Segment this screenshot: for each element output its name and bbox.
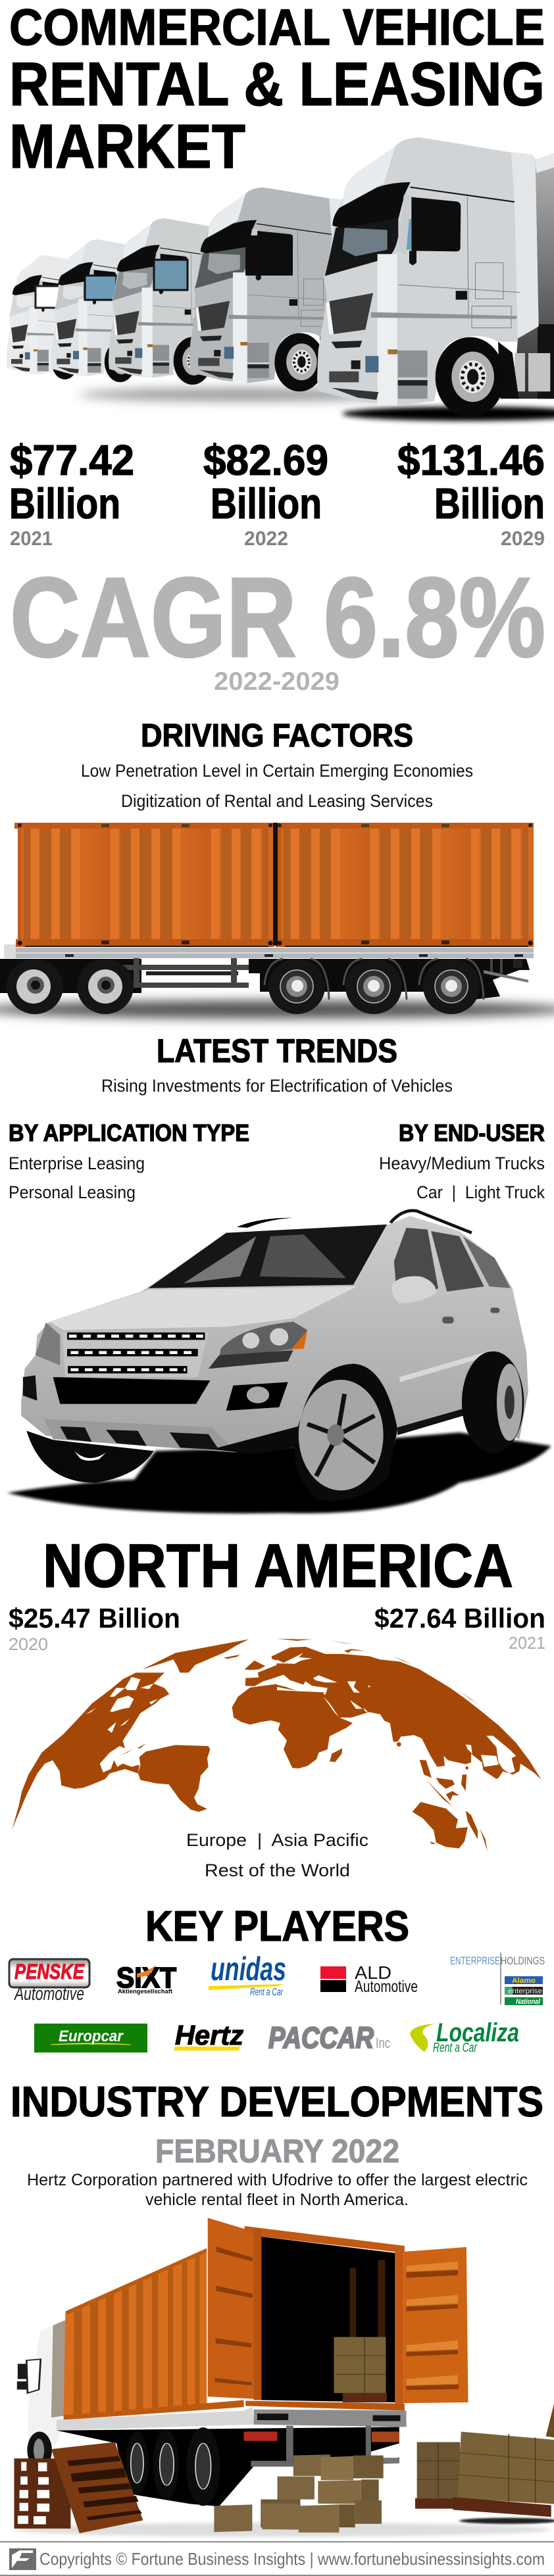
logo: Enterprise Holdings: ENTERPRISE [450,1955,500,1967]
segment: by application type: Personal Leasing [9,1182,136,1202]
stat: 2029 market size: 2029 [501,527,545,550]
stat: 2021 market size: 2021 [10,527,53,550]
logo: Penske Automotive: Automotive [14,1983,84,2005]
stat: north america 2021: $27.64 Billion [374,1603,545,1634]
logo: PACCAR: PACCAR [268,2021,374,2054]
logo: Penske Automotive [9,1959,89,2005]
footer [0,2541,554,2576]
heading: driving factors: DRIVING FACTORS [141,718,413,754]
text: driving factors list [81,761,473,811]
image: open container truck with pallets and boxes [14,2218,554,2537]
world map [12,1639,541,1851]
logo: ALD Automotive: Automotive [355,1978,418,1996]
logo: Sixt: Aktiengesellschaft [118,1988,173,1995]
title [9,0,545,182]
date: february 2022: FEBRUARY 2022 [155,2133,399,2170]
text: driving factors list: Low Penetration Level in Certain Emerging Economies [81,761,473,781]
logo: Enterprise Holdings: National [516,1998,541,2006]
segment: by application type: Enterprise Leasing [9,1154,145,1173]
logo: ALD Automotive [320,1962,418,1996]
logo: ALD Automotive: ALD [355,1962,391,1983]
logo: Hertz: Hertz [175,2020,243,2051]
text: other regions: Europe | Asia Pacific [186,1830,368,1850]
logo: Localiza [410,2018,519,2055]
logo: Unidas: unidas [211,1951,286,1987]
hero image: fleet of white trucks [7,137,554,421]
logo: Localiza: Rent a Car [433,2041,478,2055]
segment: by end-user [379,1119,545,1202]
heading: latest trends: LATEST TRENDS [157,1033,397,1069]
logo: Sixt: SIXT [116,1962,176,1994]
CAGR callout: 2022-2029 [214,668,340,696]
text: development description: vehicle rental fleet in North America. [145,2191,409,2209]
logo: Enterprise Holdings: enterprise [508,1987,542,1995]
stat: 2029 market size: $131.46 [397,436,545,484]
stat: north america 2020: 2020 [9,1634,48,1654]
icon: fortune business insights logo [9,2548,36,2570]
heading: key players: KEY PLAYERS [145,1902,409,1950]
title: MARKET [9,112,245,182]
stat: 2021 market size: $77.42 [10,436,134,484]
logo: Unidas: Rent a Car [250,1987,283,1998]
stat: 2021 market size [9,436,134,550]
segment: by end-user: Heavy/Medium Trucks [379,1154,545,1173]
stat: 2021 market size: Billion [9,479,120,527]
logo: Localiza: Localiza [436,2018,519,2047]
text: driving factors list: Digitization of Rental and Leasing Services [121,791,433,811]
logo: Europcar: Europcar [59,2028,124,2045]
stat: 2022 market size: Billion [211,479,322,527]
text: development description [27,2171,528,2209]
logo: Enterprise Holdings: Alamo [512,1977,536,1985]
logo: Europcar [34,2024,147,2053]
stat: north america 2020: $25.47 Billion [9,1603,180,1634]
stat: 2022 market size: $82.69 [203,436,328,484]
segment: by application type: BY APPLICATION TYPE [9,1119,249,1146]
text: development description: Hertz Corporation partnered with Ufodrive to offer the largest electric [27,2171,528,2189]
segment: by end-user: Car | Light Truck [416,1182,545,1202]
heading: north america: NORTH AMERICA [43,1531,513,1600]
stat: north america 2021 [374,1603,545,1653]
stat: 2029 market size [397,436,545,550]
logo: Penske Automotive: PENSKE [14,1960,85,1983]
image: silver SUV [7,1211,551,1513]
text: other regions [186,1830,368,1880]
logo: PACCAR: Inc [376,2035,390,2051]
image: container trailer [0,823,554,1019]
logo: Enterprise Holdings [450,1953,545,2006]
logo: Unidas [209,1951,286,1998]
segment: by application type [9,1119,249,1202]
text: latest trend: Rising Investments for Electrification of Vehicles [101,1076,453,1096]
stat: north america 2020 [9,1603,180,1654]
stat: 2022 market size [203,436,328,550]
text: other regions: Rest of the World [205,1860,350,1880]
stat: 2022 market size: 2022 [244,527,288,550]
stat: north america 2021: 2021 [509,1633,545,1653]
